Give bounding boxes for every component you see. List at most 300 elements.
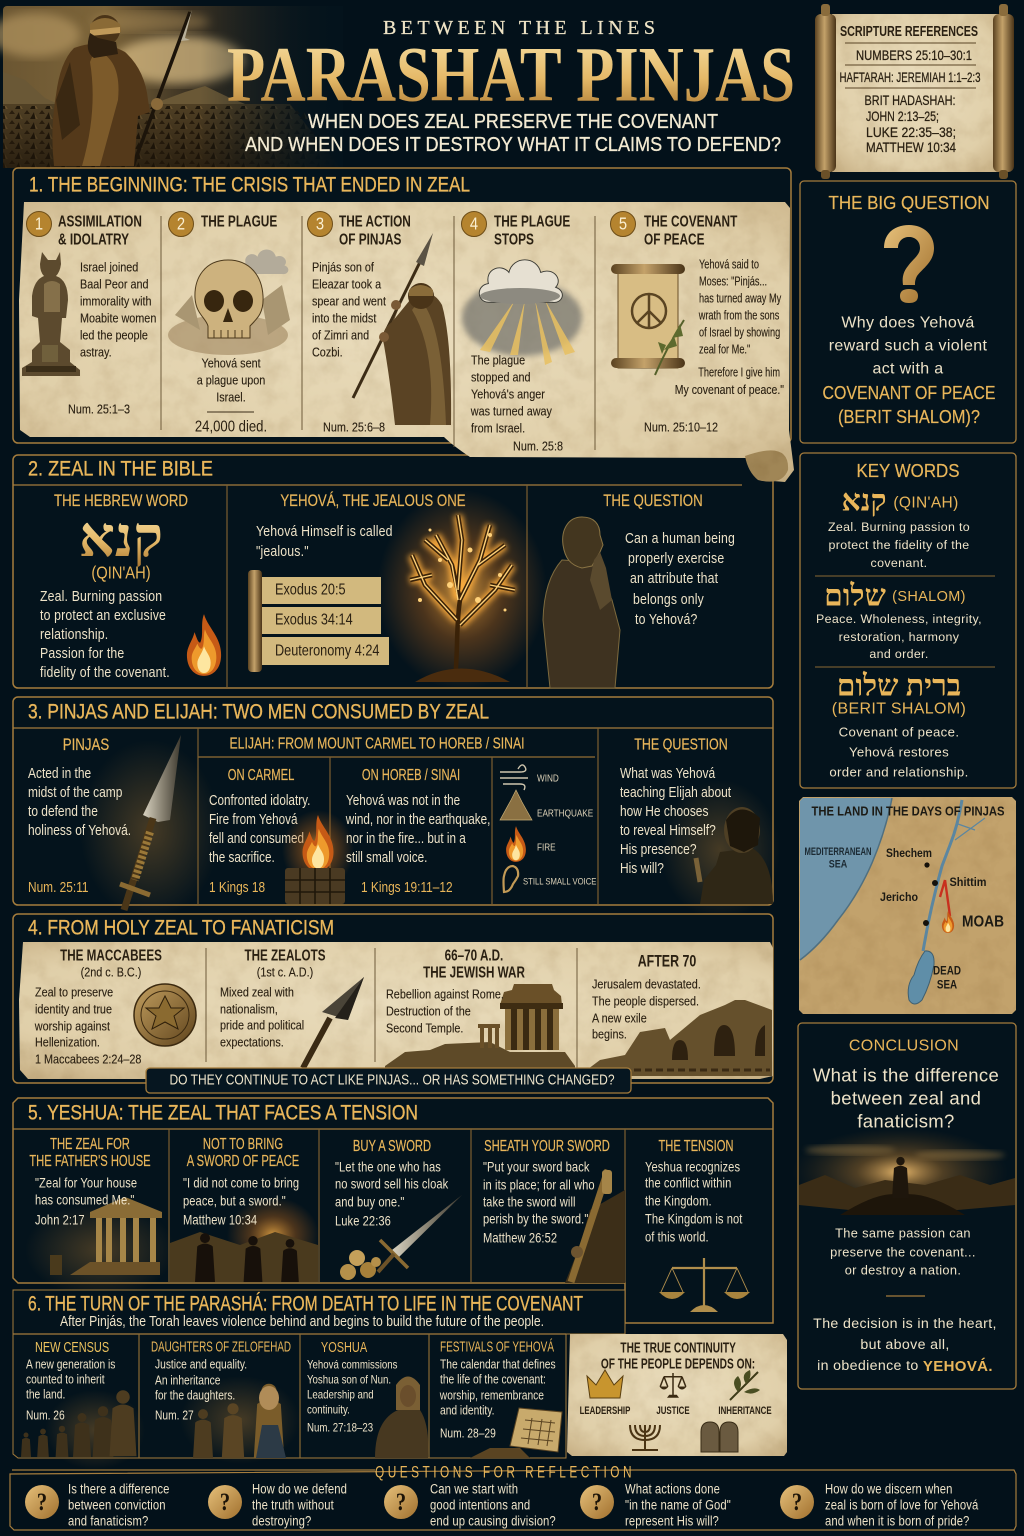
column: buy a sword: no sword sell his cloak	[335, 1176, 449, 1192]
column: Yoshua: Yehová commissions	[307, 1358, 397, 1372]
small heading: between the lines: BETWEEN THE LINES	[383, 17, 655, 39]
question 1: and fanaticism?	[68, 1513, 148, 1529]
step 1: ASSIMILATION	[58, 212, 142, 230]
column: on Carmel: Fire from Yehová	[209, 811, 298, 827]
column: daughters of Zelofehad: Justice and equality.	[155, 1358, 247, 1372]
callout banner: DO THEY CONTINUE TO ACT LIKE PINJAS... OR HAS SOMETHING CHANGED?	[170, 1072, 614, 1088]
column: the Hebrew word: relationship.	[40, 626, 108, 642]
icon: temple	[50, 1197, 162, 1275]
panel: key words	[800, 453, 1016, 788]
parchment: the true continuity	[567, 1334, 787, 1456]
column: Jewish war: 66–70 A.D.	[445, 946, 503, 964]
column: the question	[620, 736, 773, 904]
column: Yoshua	[307, 1338, 428, 1458]
question 1: between conviction	[68, 1497, 166, 1513]
column: Zealots	[220, 946, 364, 1068]
column: the question	[543, 492, 735, 688]
icon: cloaked figure with sheathed sword	[565, 1170, 625, 1283]
column: buy a sword: BUY A SWORD	[353, 1136, 431, 1154]
column: Yoshua: Num. 27:18–23	[307, 1421, 373, 1435]
column: the Hebrew word: Zeal. Burning passion	[40, 588, 162, 604]
man with raised finger	[696, 807, 773, 904]
step 5: has turned away My	[699, 292, 782, 306]
scroll: scripture references: MATTHEW 10:34	[866, 139, 956, 155]
icon: coin with star	[134, 984, 196, 1046]
column: not to bring: NOT TO BRING	[203, 1134, 283, 1152]
column: the jealous one	[248, 490, 547, 690]
question 1: Is there a difference	[68, 1481, 169, 1497]
step 3: Pinjás son of	[312, 259, 375, 275]
column: on Carmel: ON CARMEL	[228, 765, 295, 783]
column: on Horeb: ON HOREB / SINAI	[362, 765, 460, 783]
question 5: and when it is born of pride?	[825, 1513, 969, 1529]
panel: map of the land: DEAD	[933, 964, 961, 978]
panel: map of the land	[799, 797, 1016, 1014]
icon: justice scale	[660, 1373, 686, 1398]
column: after 70: The people dispersed.	[592, 993, 699, 1009]
column: zeal for the house	[25, 1134, 175, 1298]
column: the question: THE QUESTION	[634, 736, 728, 754]
step 5: of Israel by showing	[699, 326, 780, 340]
column: on Carmel: 1 Kings 18	[209, 879, 265, 895]
step 2	[168, 212, 290, 436]
column: the question: His will?	[620, 860, 664, 876]
column: on Horeb: nor in the fire... but in a	[346, 830, 466, 846]
step 5: My covenant of peace."	[675, 383, 784, 397]
column: the question: an attribute that	[630, 570, 718, 586]
panel: conclusion: preserve the covenant...	[830, 1244, 976, 1260]
column: the jealous one: YEHOVÁ, THE JEALOUS ONE	[280, 492, 466, 510]
question 1	[25, 1481, 169, 1529]
icon: spear	[303, 977, 364, 1068]
step 5: THE COVENANT	[644, 212, 738, 230]
icon: Pinjas with spear	[353, 233, 451, 425]
step 3: THE ACTION	[339, 212, 411, 230]
panel: key words: KEY WORDS	[856, 461, 960, 481]
column: the Hebrew word: fidelity of the covenant.	[40, 664, 170, 680]
column: Maccabees	[34, 946, 196, 1067]
panel: conclusion: The same passion can	[835, 1226, 971, 1240]
column: the question: His presence?	[620, 841, 696, 857]
column: Jewish war: Destruction of the	[386, 1003, 471, 1019]
icon: peace scroll	[611, 264, 685, 375]
column: Yoshua: continuity.	[307, 1403, 350, 1417]
step 2: 24,000 died.	[195, 418, 267, 436]
column: new census: A new generation is	[26, 1358, 116, 1372]
column: daughters of Zelofehad: for the daughters.	[155, 1389, 235, 1403]
column: after 70	[580, 953, 772, 1076]
column: Pinjas: Num. 25:11	[28, 879, 89, 895]
column: the question: belongs only	[633, 591, 704, 607]
main title: PARASHAT PINJAS	[227, 30, 795, 118]
panel: the big question	[800, 181, 1016, 443]
parchment strip with curl	[19, 202, 794, 482]
column: the question: What was Yehová	[620, 765, 716, 781]
column: not to bring: peace, but a sword."	[183, 1193, 286, 1209]
column: festivals of Yehova: and identity.	[440, 1404, 494, 1418]
column: the question: to Yehová?	[635, 611, 698, 627]
column: daughters of Zelofehad: DAUGHTERS OF ZELOFEHAD	[151, 1338, 291, 1356]
scene: lone figure at sunrise	[792, 1128, 1015, 1216]
column: daughters of Zelofehad	[151, 1338, 300, 1464]
icon: crown	[587, 1370, 623, 1398]
column: on Horeb	[345, 765, 490, 895]
step 5: 5	[619, 214, 627, 234]
panel: key words: and order.	[869, 647, 929, 661]
question 3	[384, 1481, 556, 1529]
step 4: was turned away	[470, 403, 552, 419]
burning tree	[377, 490, 547, 690]
header scene: man with spear over camp	[0, 6, 343, 168]
panel: key words: Zeal. Burning passion to	[828, 520, 970, 534]
column: new census: counted to inherit	[26, 1373, 105, 1387]
panel: key words: שלום	[824, 580, 886, 612]
panel: the big question: Why does Yehová	[841, 314, 975, 332]
question 4: What actions done	[625, 1481, 720, 1497]
step 3: into the midst	[312, 310, 377, 326]
scroll: scripture references: BRIT HADASHAH:	[864, 92, 956, 108]
panel: map of the land: Jericho	[880, 890, 918, 904]
column: buy a sword	[335, 1136, 462, 1280]
step 1: 1	[35, 214, 43, 234]
panel: conclusion: The decision is in the heart,	[813, 1316, 997, 1332]
column: festivals of Yehova: FESTIVALS OF YEHOVÁ	[440, 1338, 554, 1356]
question 4: "in the name of God"	[625, 1497, 731, 1513]
panel: section 4 from holy zeal to fanaticism	[13, 914, 773, 1083]
column: on Carmel: Confronted idolatry.	[209, 792, 310, 808]
panel: the big question: reward such a violent	[829, 338, 987, 354]
column: Maccabees: Zeal to preserve	[35, 984, 113, 1000]
step 5: Therefore I give him	[698, 366, 780, 380]
scroll plaques: references: Deuteronomy 4:24	[275, 642, 380, 660]
column: wind earthquake fire voice icons: WIND	[537, 773, 559, 783]
icon: ear	[504, 866, 518, 892]
icon: sword and coins	[340, 1195, 462, 1280]
column: daughters of Zelofehad: Num. 27	[155, 1409, 194, 1423]
column: Pinjas: to defend the	[28, 803, 98, 819]
step 5: Num. 25:10–12	[644, 419, 718, 435]
column: Yoshua: Yoshua son of Nun.	[307, 1373, 391, 1387]
column: the tension: THE TENSION	[658, 1136, 734, 1154]
column: the Hebrew word: to protect an exclusive	[40, 607, 166, 623]
column: not to bring: A SWORD OF PEACE	[187, 1151, 299, 1169]
panel: map of the land: SEA	[937, 978, 957, 992]
column: Jewish war: Second Temple.	[386, 1020, 463, 1036]
scroll: scripture references: NUMBERS 25:10–30:1	[856, 47, 972, 63]
scroll: scripture references: SCRIPTURE REFERENCES	[840, 24, 978, 40]
panel: key words: (BERIT SHALOM)	[832, 700, 966, 718]
column: on Horeb: 1 Kings 19:11–12	[361, 879, 453, 895]
question 2	[208, 1481, 347, 1529]
step 5	[610, 212, 784, 435]
question 2: ?	[220, 1488, 230, 1516]
step 5: Yehová said to	[699, 258, 759, 272]
column: festivals of Yehova: Num. 28–29	[440, 1427, 496, 1441]
icon: altar with fire	[282, 810, 354, 904]
panel: key words: Covenant of peace.	[839, 724, 959, 740]
column: Maccabees: Hellenization.	[35, 1034, 100, 1050]
question 2: How do we defend	[252, 1481, 347, 1497]
panel: conclusion: CONCLUSION	[849, 1038, 959, 1054]
step 4: The plague	[471, 352, 525, 368]
column: Pinjas: Acted in the	[28, 765, 91, 781]
column: Jewish war	[385, 946, 575, 1078]
panel: questions for reflection	[10, 1462, 1016, 1530]
step 4: Num. 25:8	[513, 438, 563, 454]
column: Maccabees: identity and true	[35, 1001, 112, 1017]
question 5	[780, 1481, 979, 1529]
step 3: 3	[316, 214, 324, 234]
column: after 70: AFTER 70	[638, 953, 696, 971]
icon: flame	[187, 614, 221, 676]
column: Zealots: THE ZEALOTS	[244, 946, 326, 964]
column: sheath your sword: Matthew 26:52	[483, 1230, 557, 1246]
icon: calendar	[470, 1408, 562, 1458]
step 2: THE PLAGUE	[201, 212, 277, 230]
panel: the big question: COVENANT OF PEACE	[822, 383, 996, 403]
column: Jewish war: THE JEWISH WAR	[423, 963, 525, 981]
step 3: spear and went	[312, 293, 387, 309]
heading 6: 6. THE TURN OF THE PARASHÁ: FROM DEATH TO LIFE IN THE COVENANT	[28, 1292, 583, 1316]
step 4	[462, 212, 582, 454]
column: on Horeb: wind, nor in the earthquake,	[345, 811, 490, 827]
column: Yoshua: YOSHUA	[321, 1338, 367, 1356]
icon: wind	[500, 765, 528, 790]
column: the tension: the conflict within	[645, 1175, 731, 1191]
column: new census: NEW CENSUS	[35, 1338, 109, 1356]
panel: key words: order and relationship.	[829, 764, 969, 780]
panel: section 2 zeal in the bible	[13, 455, 773, 690]
column: on Horeb: Yehová was not in the	[346, 792, 460, 808]
question 1: ?	[37, 1488, 47, 1516]
column: on Carmel	[209, 765, 354, 904]
column: zeal for the house: John 2:17	[35, 1212, 85, 1228]
scroll: scripture references: LUKE 22:35–38;	[866, 124, 956, 140]
step 1: astray.	[80, 344, 112, 360]
step 1: Israel joined	[80, 259, 138, 275]
step 4: 4	[470, 214, 478, 234]
step 2: Yehová sent	[201, 355, 261, 371]
column: zeal for the house: has consumed Me."	[35, 1192, 134, 1208]
column: after 70: A new exile	[592, 1010, 647, 1026]
question 2: the truth without	[252, 1497, 334, 1513]
step 1: immorality with	[80, 293, 152, 309]
column: the question: Can a human being	[625, 530, 735, 546]
step 1: & IDOLATRY	[58, 230, 129, 248]
column: Zealots: (1st c. A.D.)	[257, 964, 313, 980]
people	[21, 1390, 136, 1457]
column: sheath your sword: "Put your sword back	[483, 1159, 590, 1175]
panel: key words: covenant.	[871, 556, 927, 570]
subtitle	[245, 111, 781, 156]
column: the jealous one: Yehová Himself is called	[256, 523, 393, 539]
column: wind earthquake fire voice icons	[500, 765, 597, 892]
icon: large spear	[120, 735, 181, 910]
column: the question: THE QUESTION	[603, 492, 703, 510]
panel: map of the land: MEDITERRANEAN	[804, 846, 872, 858]
column: buy a sword: "Let the one who has	[335, 1159, 441, 1175]
column: buy a sword: Luke 22:36	[335, 1213, 391, 1229]
column: on Carmel: the sacrifice.	[209, 849, 275, 865]
scroll: scripture references: JOHN 2:13–25;	[866, 108, 939, 124]
step 4: from Israel.	[471, 420, 525, 436]
column: Pinjas: PINJAS	[63, 736, 109, 754]
column: Zealots: expectations.	[220, 1034, 284, 1050]
scroll plaques: references: Exodus 34:14	[275, 611, 353, 629]
icon: olive branch	[730, 1370, 760, 1400]
icon: ruined temple	[385, 984, 575, 1078]
thinking man	[543, 517, 620, 688]
step 3: of Zimri and	[312, 327, 369, 343]
step 2: Israel.	[216, 389, 246, 405]
column: the jealous one: "jealous."	[256, 543, 309, 559]
column: Maccabees: (2nd c. B.C.)	[81, 964, 141, 980]
column: the tension: The Kingdom is not	[645, 1211, 743, 1227]
column: the Hebrew word: (QIN'AH)	[91, 563, 151, 583]
panel: section 3 Pinjas and Elijah	[13, 697, 780, 920]
step 3: Num. 25:6–8	[323, 419, 385, 435]
figure	[133, 12, 190, 166]
panel: conclusion: What is the difference	[813, 1064, 999, 1086]
column: Pinjas: holiness of Yehová.	[28, 822, 131, 838]
panel: the big question: (BERIT SHALOM)?	[838, 407, 980, 427]
heading 5: 5. YESHUA: THE ZEAL THAT FACES A TENSION	[28, 1102, 418, 1124]
step 4: STOPS	[494, 230, 534, 248]
icon: earthquake mountains	[500, 790, 532, 820]
question 3: good intentions and	[430, 1497, 530, 1513]
panel: key words: protect the fidelity of the	[828, 538, 970, 552]
step 5: zeal for Me."	[699, 343, 750, 357]
column: Pinjas: midst of the camp	[28, 784, 122, 800]
parchment: the true continuity: INHERITANCE	[718, 1405, 772, 1417]
column: Maccabees: worship against	[34, 1018, 111, 1034]
panel: map of the land: Shittim	[950, 875, 986, 889]
column: daughters of Zelofehad: An inheritance	[155, 1374, 220, 1388]
step 3: OF PINJAS	[339, 230, 401, 248]
step 3: Eleazar took a	[312, 276, 381, 292]
question 2: destroying?	[252, 1513, 311, 1529]
step 3: Cozbi.	[312, 344, 343, 360]
column: new census: Num. 26	[26, 1409, 65, 1423]
panel: map of the land: MOAB	[962, 914, 1004, 930]
panel: map of the land: SEA	[829, 859, 847, 871]
panel: section 1 the beginning	[13, 168, 794, 482]
heading 4: 4. FROM HOLY ZEAL TO FANATICISM	[28, 916, 334, 940]
subtitle: AND WHEN DOES IT DESTROY WHAT IT CLAIMS TO DEFEND?	[245, 134, 781, 156]
subtitle: WHEN DOES ZEAL PRESERVE THE COVENANT	[308, 111, 718, 133]
icon: fire	[506, 826, 526, 862]
panel: section 5 Yeshua	[13, 1098, 773, 1323]
column: new census: the land.	[26, 1388, 65, 1402]
column: the tension: of this world.	[645, 1229, 709, 1245]
column: after 70: Jerusalem devastated.	[592, 976, 701, 992]
step 4: THE PLAGUE	[494, 212, 570, 230]
step 1: Num. 25:1–3	[68, 401, 130, 417]
column: Zealots: pride and political	[220, 1017, 304, 1033]
column: Jewish war: Rebellion against Rome.	[386, 986, 504, 1002]
column: the tension: Yeshua recognizes	[645, 1159, 740, 1175]
column: zeal for the house: THE ZEAL FOR	[50, 1134, 130, 1152]
women	[193, 1384, 286, 1458]
column: Elijah header: ELIJAH: FROM MOUNT CARMEL TO HOREB / SINAI	[230, 736, 524, 752]
column: buy a sword: and buy one."	[335, 1194, 404, 1210]
column: festivals of Yehova: worship, remembrance	[439, 1389, 544, 1403]
panel: key words: (QIN'AH)	[893, 494, 959, 512]
step 3	[308, 212, 451, 435]
panel: key words: restoration, harmony	[839, 630, 960, 644]
column: wind earthquake fire voice icons: STILL SMALL VOICE	[523, 876, 597, 886]
column: the tension: the Kingdom.	[645, 1193, 712, 1209]
icon: menorah	[630, 1425, 660, 1450]
panel: conclusion: or destroy a nation.	[845, 1262, 961, 1278]
column: not to bring: "I did not come to bring	[183, 1175, 299, 1191]
heading 2: 2. ZEAL IN THE BIBLE	[28, 458, 213, 480]
panel: conclusion: fanaticism?	[857, 1110, 955, 1132]
column: the Hebrew word: THE HEBREW WORD	[54, 492, 188, 510]
column: Maccabees: THE MACCABEES	[60, 946, 162, 964]
question 4: ?	[592, 1488, 602, 1516]
subheading: After Pinjás, the Torah leaves violence behind and begins to build the future of the people.	[60, 1314, 544, 1330]
heading 1: 1. THE BEGINNING: THE CRISIS THAT ENDED IN ZEAL	[29, 174, 470, 196]
column: on Horeb: still small voice.	[346, 849, 427, 865]
icon: idol statue	[22, 252, 80, 376]
panel: map of the land: Shechem	[886, 846, 932, 860]
step 5: wrath from the sons	[698, 309, 780, 323]
panel: key words: ברית שלום	[837, 670, 961, 702]
panel: conclusion: in obedience to YEHOVÁ.	[817, 1358, 993, 1374]
column: the Hebrew word	[40, 492, 221, 680]
column: festivals of Yehova: The calendar that defines	[440, 1358, 556, 1372]
parchment strip	[19, 942, 773, 1079]
icon: storm cloud with rays	[462, 260, 582, 365]
icon: ruins	[580, 1000, 772, 1076]
parchment: the true continuity: LEADERSHIP	[580, 1405, 630, 1417]
column: the question: how He chooses	[620, 803, 709, 819]
question 3: ?	[396, 1488, 406, 1516]
column: the tension	[645, 1136, 750, 1312]
panel: the big question: THE BIG QUESTION	[828, 193, 990, 213]
question 3: end up causing division?	[430, 1513, 556, 1529]
panel: key words: קנא	[841, 484, 887, 518]
column: the Hebrew word: Passion for the	[40, 645, 125, 661]
panel: conclusion	[792, 1023, 1016, 1389]
panel: the big question: act with a	[872, 360, 944, 378]
panel: key words: Yehová restores	[849, 744, 949, 760]
column: after 70: begins.	[592, 1026, 627, 1042]
panel: key words: (SHALOM)	[892, 589, 966, 605]
scroll plaques: references	[248, 570, 389, 672]
icon: tablets	[701, 1422, 738, 1452]
column: sheath your sword: in its place; for all who	[483, 1177, 595, 1193]
step 1: Baal Peor and	[80, 276, 149, 292]
panel: conclusion: between zeal and	[831, 1088, 981, 1108]
question 3: Can we start with	[430, 1481, 518, 1497]
column: sheath your sword: perish by the sword."	[483, 1211, 588, 1227]
column: the question: properly exercise	[628, 550, 725, 566]
heading: questions for reflection: QUESTIONS FOR REFLECTION	[375, 1462, 635, 1482]
heading 3: 3. PINJAS AND ELIJAH: TWO MEN CONSUMED BY ZEAL	[28, 700, 489, 724]
column: the Hebrew word: קנא	[79, 507, 163, 569]
step 4: stopped and	[471, 369, 531, 385]
step 2: 2	[177, 214, 185, 234]
column: zeal for the house: THE FATHER'S HOUSE	[29, 1151, 151, 1169]
column: Pinjas	[28, 735, 181, 910]
column: sheath your sword: take the sword will	[483, 1194, 576, 1210]
column: the question: to reveal Himself?	[620, 822, 716, 838]
scroll plaques: references: Exodus 20:5	[275, 581, 346, 599]
column: zeal for the house: "Zeal for Your house	[35, 1175, 137, 1191]
column: not to bring	[170, 1134, 319, 1282]
